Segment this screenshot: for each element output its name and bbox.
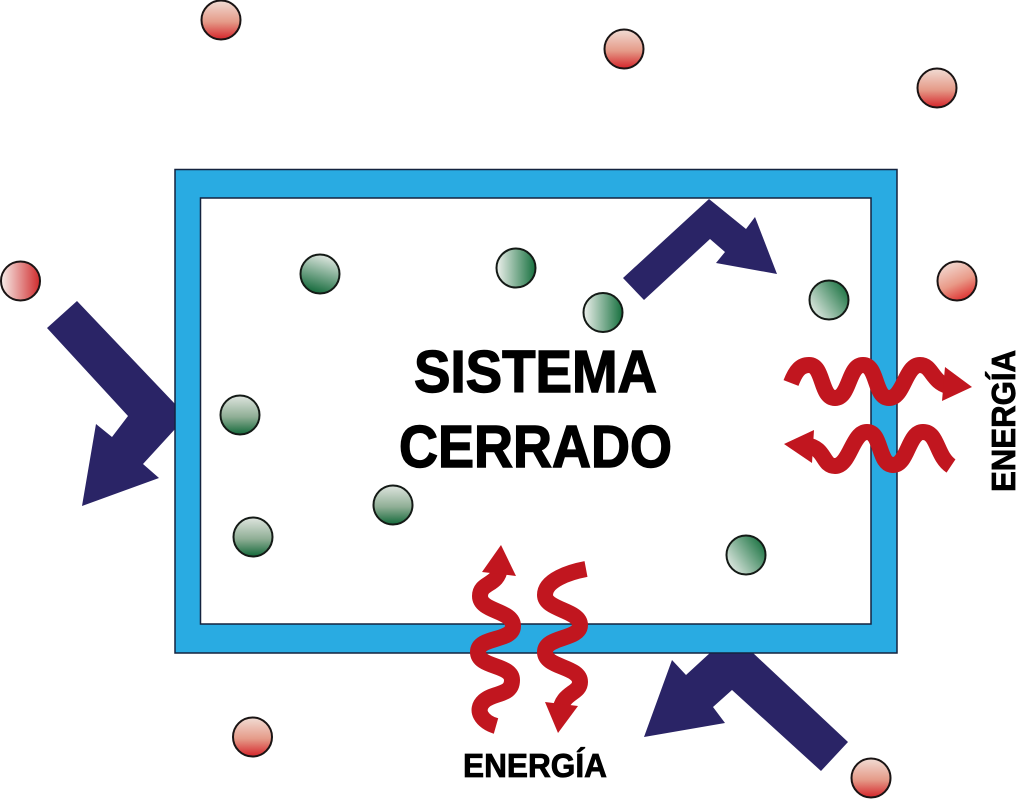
wave arrow: energy entering right — [784, 430, 951, 466]
wave arrow: energy leaving right — [791, 365, 972, 401]
label: energy bottom: ENERGÍA — [463, 747, 607, 784]
arrow: matter bouncing inside — [623, 199, 777, 300]
arrow: matter from bottom right — [644, 652, 848, 771]
title: SISTEMA — [414, 339, 657, 405]
green particles inside the system — [220, 248, 848, 574]
label: energy right: ENERGÍA — [985, 350, 1022, 492]
wave arrow: energy leaving bottom — [478, 545, 516, 726]
system boundary wall — [175, 170, 897, 653]
wave arrow: energy entering bottom — [545, 569, 586, 733]
title — [399, 339, 672, 480]
title: CERRADO — [399, 414, 672, 480]
arrow: matter enters from left — [47, 301, 176, 506]
